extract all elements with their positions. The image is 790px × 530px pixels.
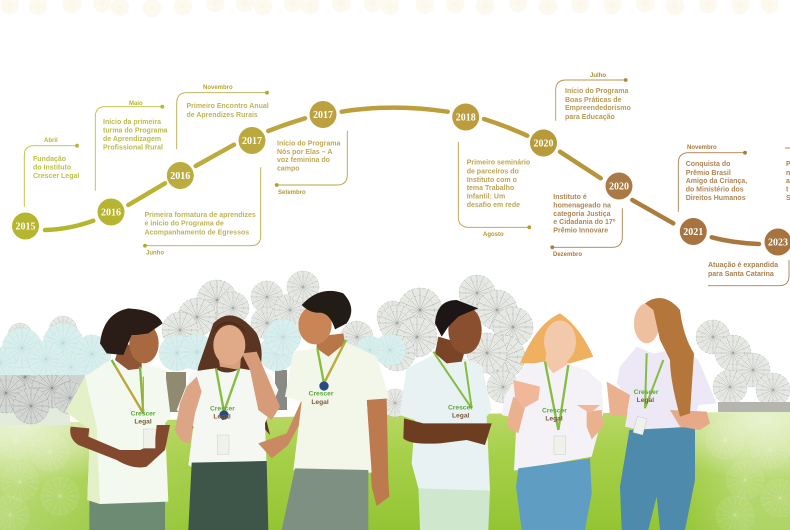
- gray dandelion backdrop: [8, 271, 790, 417]
- milestone: Junho 2016: Primeira formatura de aprendizes: [144, 212, 256, 219]
- person 1: Crescer: [131, 410, 156, 417]
- year marker 2020: 2020: [534, 138, 554, 150]
- year marker 2016: 2016: [101, 208, 121, 218]
- milestone: Julho 2020: Empreendedorismo: [565, 105, 631, 112]
- year marker 2017: 2017: [242, 136, 262, 147]
- person 6: Legal: [637, 397, 654, 404]
- milestone: Novembro 2021: Prêmio Brasil: [686, 170, 731, 177]
- milestone: Junho 2016: Acompanhamento de Egressos: [144, 229, 249, 236]
- person 6: Crescer: [634, 389, 659, 396]
- person 4: Crescer: [448, 404, 473, 411]
- person 5: Crescer: [542, 407, 567, 414]
- person 2: Crescer: [210, 406, 235, 413]
- year marker 2015: [12, 212, 39, 240]
- milestone: Novembro 2016: [177, 85, 269, 149]
- milestone: cut off at right edge: [785, 148, 790, 202]
- milestone: Dezembro 2020: categoria Justiça: [553, 211, 611, 218]
- milestone: Agosto 2018: Infantil: Um: [467, 194, 505, 200]
- milestone: Agosto 2018: Agosto: [483, 232, 504, 238]
- milestone: expansão Santa Catarina 2023: [708, 260, 789, 286]
- person 1: [66, 308, 171, 530]
- milestone: cut off at right edge: a: [786, 178, 790, 185]
- milestone: Julho 2020: Julho: [590, 73, 606, 79]
- milestone: Julho 2020: para Educação: [565, 114, 615, 121]
- year marker 2016 second: 2016: [170, 171, 190, 182]
- person 3: Legal: [311, 399, 329, 406]
- person 4: [399, 300, 492, 530]
- milestone: Setembro 2017: Início do Programa: [277, 140, 341, 148]
- milestone: Julho 2020: [556, 73, 631, 121]
- year marker 2023: [764, 228, 790, 256]
- teal dandelion backdrop: [0, 319, 406, 381]
- milestone: Novembro 2021: Novembro: [687, 145, 717, 151]
- milestone: Dezembro 2020: e Cidadania do 17º: [553, 219, 616, 226]
- person 6: [607, 298, 717, 530]
- milestone: Abril 2015: Fundação: [33, 156, 66, 163]
- person 5: Legal: [545, 415, 563, 422]
- photo: group of young people, right three: [399, 298, 717, 530]
- milestone: Junho 2016: [143, 167, 261, 256]
- connector path between years: [45, 108, 759, 244]
- milestone: Novembro 2021: Conquista do: [686, 161, 730, 168]
- milestone: Dezembro 2020: Prêmio Innovare: [553, 228, 608, 234]
- dandelions on grass: [0, 421, 790, 530]
- milestone: Novembro 2016: Novembro: [203, 85, 233, 91]
- year marker 2017: [238, 127, 266, 154]
- milestone: Setembro 2017: campo: [277, 166, 300, 172]
- milestone: Agosto 2018: desafio em rede: [467, 202, 520, 209]
- year marker 2017 second: [310, 101, 336, 128]
- milestone: Abril 2015: Abril: [44, 138, 58, 144]
- milestone: Setembro 2017: Setembro: [278, 190, 306, 196]
- milestone: Agosto 2018: [458, 142, 531, 238]
- milestone: Maio 2016: Maio: [129, 101, 143, 107]
- year marker 2016 second: [167, 162, 194, 189]
- milestone: Dezembro 2020: [550, 194, 622, 258]
- milestone: expansão Santa Catarina 2023: Atuação é expandida: [708, 262, 778, 269]
- photo: group of young people, left three: [66, 291, 389, 530]
- year marker 2015: 2015: [16, 222, 36, 232]
- year marker 2021: [680, 218, 707, 245]
- year marker 2020: [530, 130, 557, 156]
- milestone: Julho 2020: Boas Práticas de: [565, 97, 622, 104]
- person 2: [175, 315, 280, 530]
- milestone: Novembro 2021: Amigo da Criança,: [686, 178, 747, 185]
- year marker 2021: 2021: [683, 227, 703, 238]
- year marker 2020 second: [606, 172, 632, 200]
- milestone: Novembro 2016: Primeiro Encontro Anual: [186, 103, 269, 110]
- milestone: Maio 2016: Profissional Rural: [103, 144, 163, 151]
- milestone: Novembro 2021: do Ministério dos: [686, 186, 744, 194]
- timeline: [12, 73, 790, 286]
- year marker 2020 second: 2020: [609, 182, 629, 192]
- person 2: Legal: [213, 414, 231, 421]
- person 5: [502, 313, 603, 530]
- milestone: Abril 2015: do Instituto: [33, 164, 71, 171]
- milestone: Novembro 2021: Direitos Humanos: [686, 195, 746, 202]
- milestone: Maio 2016: Início da primeira: [103, 119, 161, 126]
- milestone: Junho 2016: e início do Programa de: [144, 221, 224, 228]
- grass field: [0, 412, 790, 530]
- milestone: Setembro 2017: voz feminina do: [277, 157, 330, 164]
- person 4: Legal: [452, 412, 470, 419]
- year marker 2017 second: 2017: [313, 110, 333, 121]
- milestone: Setembro 2017: [275, 131, 347, 196]
- milestone: Setembro 2017: Nós por Elas – A: [277, 149, 332, 156]
- year marker 2018: [452, 104, 479, 130]
- gray dandelion row at left: [0, 375, 85, 425]
- year marker 2016: [98, 198, 124, 226]
- milestone: Maio 2016: de Aprendizagem: [103, 136, 161, 143]
- milestone: Junho 2016: Junho: [146, 250, 164, 256]
- milestone: Abril 2015: Crescer Legal: [33, 173, 79, 180]
- milestone: Dezembro 2020: Instituto é: [553, 194, 587, 201]
- person 1: Legal: [134, 418, 152, 425]
- milestone: cut off at right edge: t: [786, 186, 789, 194]
- milestone: Agosto 2018: tema Trabalho: [467, 185, 514, 192]
- milestone: Maio 2016: [95, 101, 168, 191]
- milestone: Dezembro 2020: homenageado na: [553, 202, 611, 210]
- milestone: Agosto 2018: Instituto com o: [467, 177, 517, 184]
- milestone: Dezembro 2020: Dezembro: [553, 252, 582, 258]
- year marker 2023: 2023: [768, 238, 788, 248]
- milestone: expansão Santa Catarina 2023: para Santa Catarina: [708, 271, 774, 278]
- decorative top dandelion band: [1, 0, 779, 17]
- milestone: Abril 2015: [24, 138, 79, 207]
- milestone: Novembro 2016: de Aprendizes Rurais: [186, 112, 258, 119]
- year marker 2018: 2018: [456, 112, 476, 124]
- person 3: Crescer: [309, 391, 334, 398]
- milestone: Agosto 2018: de parceiros do: [467, 168, 519, 176]
- person 3: [258, 291, 389, 530]
- milestone: Julho 2020: Início do Programa: [565, 88, 629, 95]
- milestone: Novembro 2021: [678, 145, 747, 212]
- milestone: Maio 2016: turma do Programa: [103, 128, 168, 134]
- milestone: Agosto 2018: Primeiro seminário: [467, 160, 530, 166]
